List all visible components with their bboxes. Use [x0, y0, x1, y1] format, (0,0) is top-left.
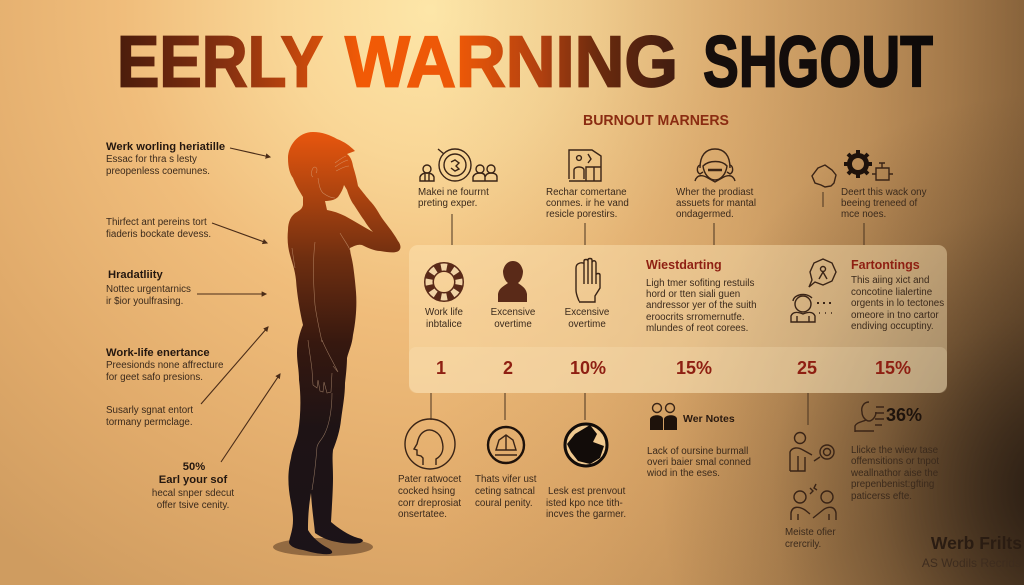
callout 1	[106, 141, 225, 177]
text: head: cocked hsing	[398, 486, 455, 497]
icon: lifebuoy	[429, 267, 459, 297]
text: head: Pater ratwocet	[398, 474, 461, 485]
watermark: AS Wodils Recrids	[922, 556, 1021, 570]
text: head	[398, 474, 461, 520]
text: globe: Lesk est prenvout	[548, 486, 626, 497]
text: marker 1: preting exper.	[418, 198, 477, 209]
callout 5: Susarly sgnat entort	[106, 405, 193, 416]
text: wer notes	[646, 446, 751, 479]
callout 3	[106, 269, 191, 307]
figure: person holding head	[273, 132, 400, 556]
text: globe	[546, 486, 626, 520]
block: fartontings: orgents in lo tectones	[851, 298, 944, 309]
callout 3: Hradatliity	[108, 269, 163, 281]
title	[117, 22, 933, 102]
block: wiestdarting: mlundes of reot corees.	[646, 323, 748, 334]
callout 5	[106, 405, 193, 428]
callout 1: preopenless coemunes.	[106, 166, 210, 177]
numbers row	[436, 358, 911, 378]
text: 36%: prepenbenist:gfting	[851, 479, 934, 490]
callout 1: Werk worling heriatille	[106, 141, 225, 153]
text: wer notes: overi baier smal conned	[647, 457, 751, 468]
left column callouts	[106, 141, 234, 511]
bottom row	[398, 402, 939, 550]
block: fartontings: omeore in tno cartor	[851, 310, 939, 321]
numbers row: 10%	[570, 358, 606, 378]
icon: document with figures	[569, 150, 601, 181]
title: SHGOUT	[703, 22, 933, 102]
text: globe: incves the garmer.	[546, 509, 626, 520]
connector lines	[431, 192, 864, 425]
text: marker 2: conmes. ir he vand	[546, 198, 629, 209]
label: excessive overtime	[491, 307, 536, 330]
icon: gears	[812, 150, 893, 187]
block: fartontings: endiving occuptiny.	[851, 321, 934, 332]
numbers row: 25	[797, 358, 817, 378]
callout 6: 50%: 50%	[183, 461, 205, 473]
block: wiestdarting: eroocrits srromernutfe.	[646, 312, 745, 323]
block: fartontings: Fartontings	[851, 258, 920, 272]
icon: two people	[650, 404, 677, 430]
text: crown	[475, 474, 537, 509]
callout 6: 50%: Earl your sof	[159, 474, 227, 486]
top row markers	[418, 149, 927, 220]
label: excessive overtime: overtime	[494, 319, 532, 330]
text: crown: Thats vifer ust	[475, 474, 537, 485]
text: meiste	[785, 527, 836, 550]
icon: person with headset	[695, 149, 735, 182]
callout 4: for geet safo presions.	[106, 372, 203, 383]
block: fartontings	[851, 258, 944, 332]
callout 4: Preesionds none affrecture	[106, 360, 224, 371]
heading: wer notes: Wer Notes	[683, 413, 735, 425]
icon: person with magnifier	[790, 432, 834, 471]
block: fartontings: concotine lialertine	[851, 287, 933, 298]
text: marker 2: Rechar comertane	[546, 187, 627, 198]
text: marker 4: Deert this wack ony	[841, 187, 927, 198]
icon: person with thought bubble	[791, 259, 836, 322]
text: marker 1	[418, 187, 489, 209]
watermark	[922, 533, 1022, 570]
arrows to figure	[197, 148, 280, 462]
callout 2: fiaderis bockate devess.	[106, 229, 211, 240]
text: 36%: offemsitions or tnpot	[851, 456, 939, 467]
number strip	[409, 347, 947, 393]
text: meiste: Meiste ofier	[785, 527, 836, 538]
callout 6: 50%: offer tsive cenity.	[157, 500, 229, 511]
heading: burnout markers: BURNOUT MARNERS	[583, 113, 729, 129]
icon: head in circle	[405, 419, 455, 469]
text: crown: coural penity.	[475, 498, 533, 509]
label: work life: inbtalice	[426, 319, 463, 330]
text: meiste: crercrily.	[785, 539, 821, 550]
text: marker 3: Wher the prodiast	[676, 187, 754, 198]
icon: globe	[565, 424, 607, 466]
text: 36%	[850, 445, 939, 502]
watermark: Werb Frilts	[931, 533, 1022, 553]
icon: person with list	[855, 402, 884, 432]
icon: crown circle	[488, 427, 524, 463]
icon: hand	[576, 258, 600, 302]
callout 3: Nottec urgentarnics	[106, 284, 191, 295]
text: marker 2: resicle porestirs.	[546, 209, 617, 220]
title: EERLY	[117, 22, 323, 102]
panel: burnout markers table	[409, 245, 947, 393]
text: marker 2	[546, 187, 629, 220]
label: excessive overtime 2: Excensive	[565, 307, 610, 318]
icon: two people talking	[791, 484, 836, 520]
label: work life	[425, 307, 464, 330]
block: wiestdarting: Wiestdarting	[646, 258, 722, 272]
text: head: corr dreprosiat	[398, 498, 461, 509]
text: 36%: weallnathor aise the	[850, 468, 939, 479]
text: globe: isted kpo nce tith-	[546, 498, 623, 509]
text: marker 1: Makei ne fourrnt	[418, 187, 489, 198]
callout 2	[106, 217, 211, 240]
stat: 36%: 36%	[886, 405, 922, 425]
icon: worker	[498, 261, 527, 302]
callout 6: 50%: hecal snper sdecut	[152, 488, 234, 499]
text: wer notes: wiod in the eses.	[646, 468, 720, 479]
block: wiestdarting	[646, 258, 757, 334]
numbers row: 15%	[676, 358, 712, 378]
text: marker 4	[841, 187, 927, 220]
label: work life: Work life	[425, 307, 464, 318]
numbers row: 2	[503, 358, 513, 378]
text: marker 4: beeing treneed of	[841, 198, 918, 209]
text: marker 3: assuets for mantal	[676, 198, 756, 209]
text: marker 3	[676, 187, 756, 220]
block: wiestdarting: Ligh tmer sofiting restuils	[646, 278, 754, 289]
text: 36%: Llicke the wiew tase	[851, 445, 939, 456]
callout 5: tormany permclage.	[106, 417, 193, 428]
block: wiestdarting: hord or tten siali guen	[646, 289, 740, 300]
text: marker 4: mce noes.	[841, 209, 886, 220]
callout 4: Work-life enertance	[106, 347, 210, 359]
title: WARNING	[345, 22, 678, 102]
text: head: onsertatee.	[398, 509, 447, 520]
label: excessive overtime 2: overtime	[568, 319, 606, 330]
text: 36%: paticerss efte.	[851, 491, 912, 502]
text: wer notes: Lack of oursine burmall	[647, 446, 748, 457]
numbers row: 15%	[875, 358, 911, 378]
callout 6: 50%	[152, 461, 234, 511]
callout 4	[106, 347, 224, 383]
label: excessive overtime 2	[565, 307, 610, 330]
callout 3: ir $ior youlfrasing.	[106, 296, 183, 307]
text: crown: ceting satncal	[475, 486, 535, 497]
callout 2: Thirfect ant pereins tort	[106, 217, 207, 228]
text: marker 3: ondagermed.	[676, 209, 734, 220]
icon: people and cycle	[420, 149, 497, 181]
label: excessive overtime: Excensive	[491, 307, 536, 318]
numbers row: 1	[436, 358, 446, 378]
callout 1: Essac for thra s lesty	[106, 154, 197, 165]
block: fartontings: This aiing xict and	[851, 275, 929, 286]
block: wiestdarting: andressor yer of the suith	[646, 300, 757, 311]
